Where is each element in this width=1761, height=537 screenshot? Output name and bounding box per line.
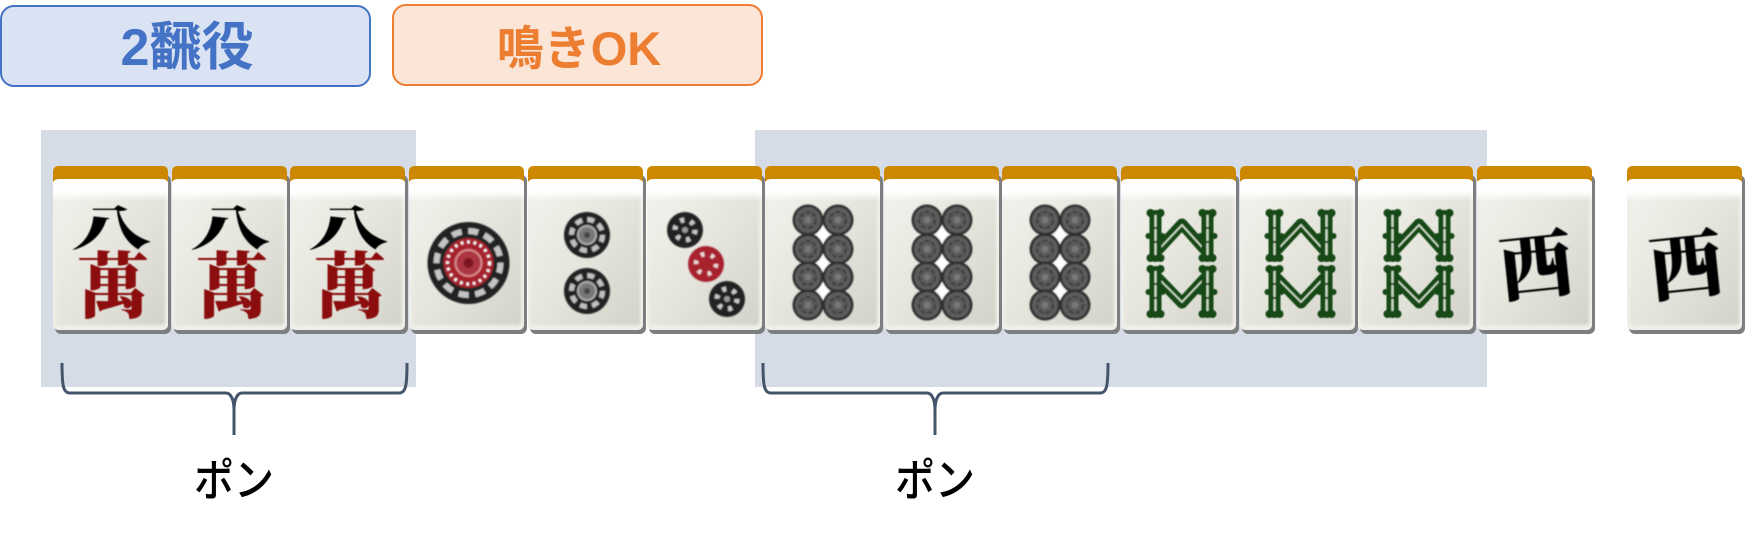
tile: 八萬 2: 八 [190,189,270,261]
badge: 鳴きOK: 鳴きOK [497,22,661,75]
tile: 八筒 1 [765,166,883,334]
panel: second highlight [755,130,1487,387]
tile: 三筒 [647,166,765,334]
bracket: first ポン [62,363,407,435]
tile: 八萬 1: 萬 [77,229,149,333]
panel: first highlight [41,130,416,387]
tile: 八索 3 [1358,166,1476,334]
label: second ポン: ポン [895,445,975,510]
label: first ポン: ポン [194,445,274,510]
tile: 八筒 3 [1002,166,1120,334]
badge: 2飜役: 2飜役 [121,19,253,77]
bracket: second ポン [763,363,1108,435]
badge: 鳴きOK [393,5,762,85]
tile: 八筒 2 [884,166,1002,334]
tile: 二筒 [528,166,646,334]
tile: 八萬 3 [290,166,408,334]
tile: 西: 西 [1493,204,1578,318]
tile: 西 (winning tile): 西 [1643,204,1728,318]
tile: 八索 2 [1240,166,1358,334]
tile: 八萬 1 [53,166,171,334]
tile: 八索 1 [1121,166,1239,334]
tile: 西 (winning tile) [1627,166,1745,334]
tile: 一筒 [409,166,527,334]
tile: 八萬 3: 八 [308,189,388,261]
badge: 2飜役 [1,6,370,86]
tile: 八萬 2: 萬 [196,229,268,333]
tile: 八萬 1: 八 [71,189,151,261]
tile: 西 [1477,166,1595,334]
tile: 八萬 2 [172,166,290,334]
tile: 八萬 3: 萬 [314,229,386,333]
